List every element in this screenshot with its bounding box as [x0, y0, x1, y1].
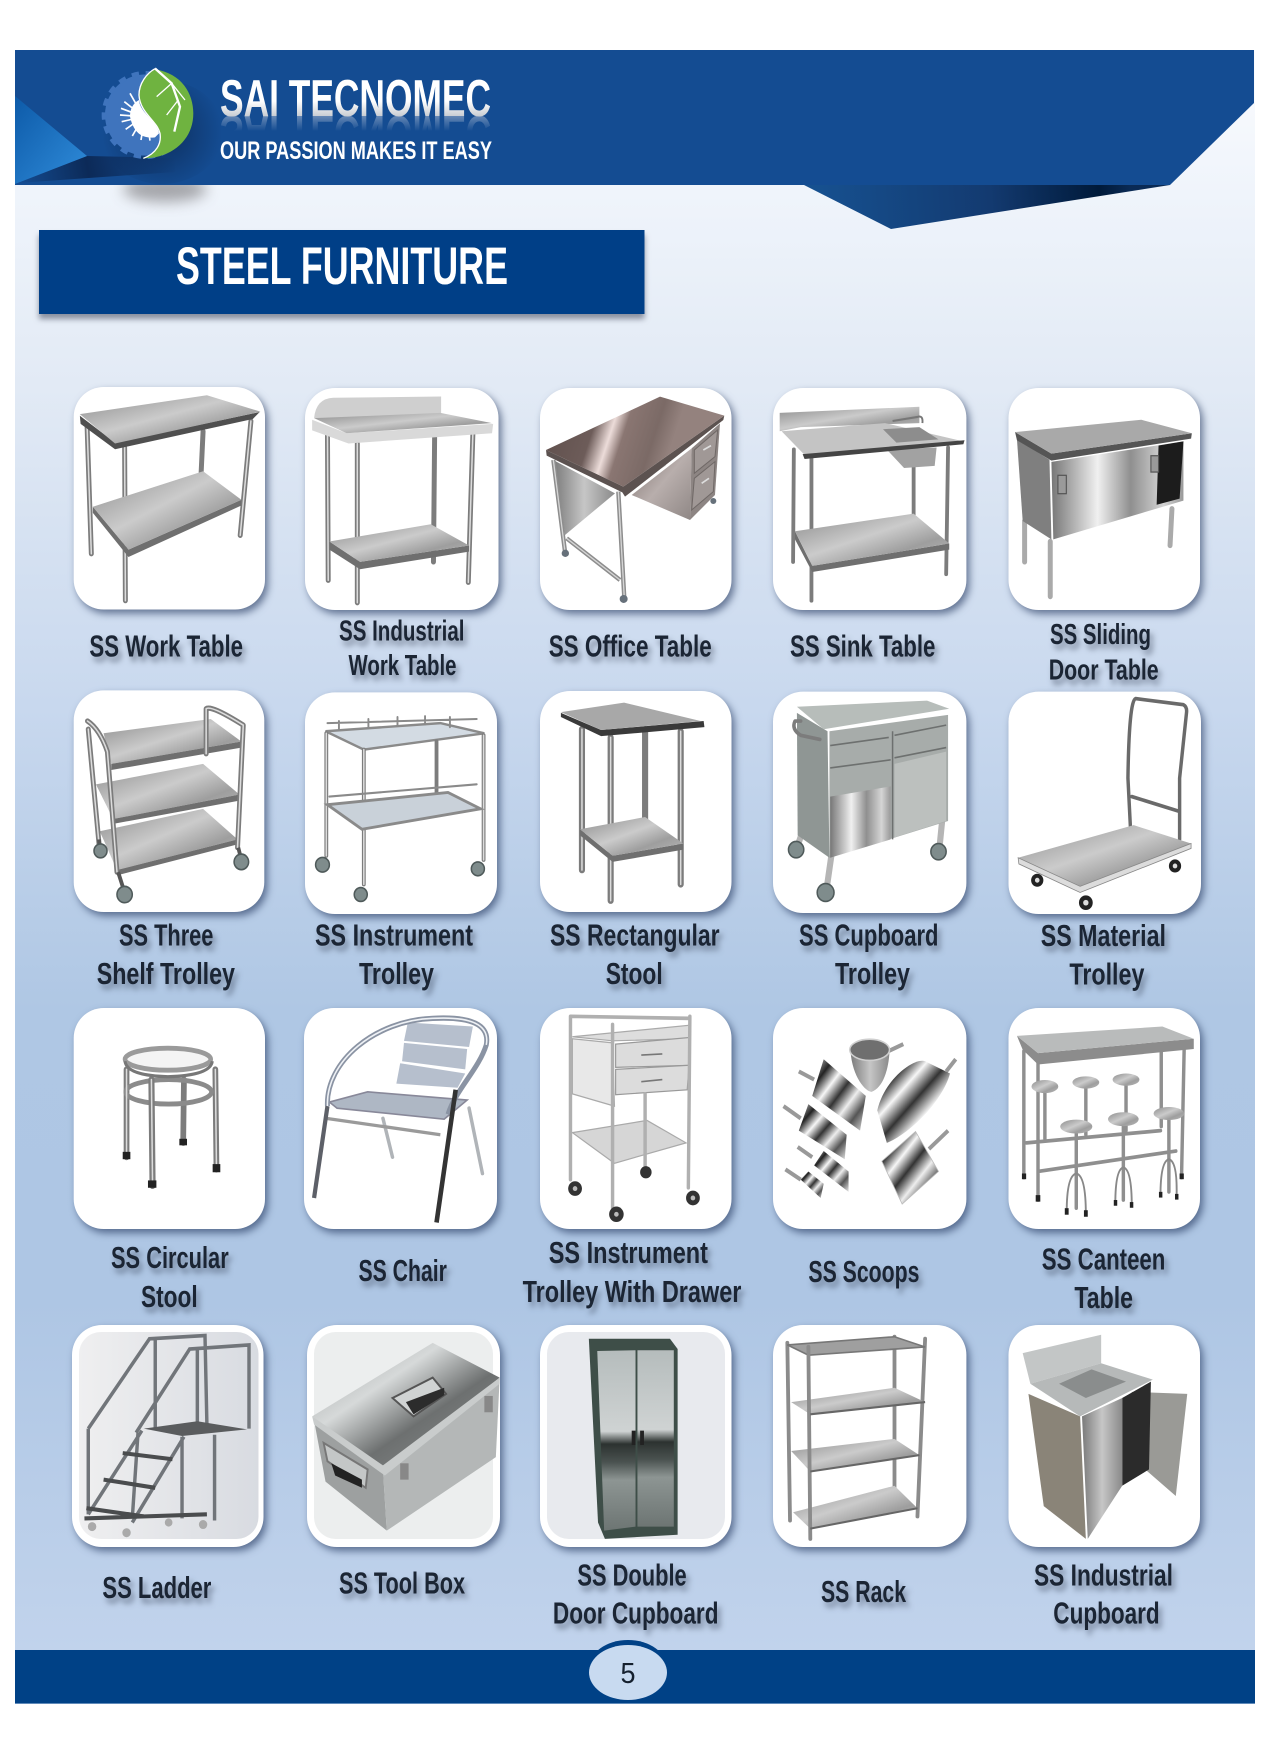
label: SS Industrial Cupboard — [1034, 1558, 1173, 1631]
product card: SS Circular Stool — [74, 1008, 265, 1314]
product card: SS Tool Box — [307, 1325, 500, 1600]
heading text: STEEL FURNITURE — [176, 237, 508, 296]
product card: SS Cupboard Trolley — [773, 692, 966, 991]
label: SS Sliding Door Table: Door Table — [1049, 654, 1159, 686]
icon: ladder — [84, 1336, 249, 1537]
label: SS Scoops: SS Scoops — [808, 1254, 919, 1289]
page number: 5 — [620, 1658, 636, 1690]
label: SS Circular Stool: SS Circular — [111, 1240, 229, 1275]
section heading — [39, 230, 644, 314]
image backdrop — [547, 1332, 725, 1539]
card background — [773, 692, 966, 913]
card background — [1008, 1008, 1200, 1229]
card background — [304, 1008, 497, 1229]
icon: scoops — [784, 1039, 956, 1204]
product card: SS Office Table — [540, 388, 732, 664]
label: SS Chair: SS Chair — [358, 1253, 447, 1288]
product card: SS Ladder — [72, 1325, 264, 1605]
label: SS Office Table: SS Office Table — [549, 628, 712, 664]
card background — [540, 1008, 732, 1229]
card background — [307, 1325, 500, 1547]
product card: SS Sink Table — [773, 388, 966, 664]
label: SS Industrial Work Table — [339, 616, 464, 682]
card background — [74, 387, 265, 610]
company name: SAI TECNOMEC — [220, 70, 491, 128]
label: SS Industrial Work Table: SS Industrial — [339, 616, 464, 648]
card background — [305, 388, 498, 610]
product card: SS Sliding Door Table — [1008, 388, 1200, 686]
label: SS Instrument Trolley: SS Instrument — [315, 918, 473, 952]
icon: company logo gear and leaf — [104, 68, 193, 158]
label: SS Canteen Table: SS Canteen — [1042, 1241, 1165, 1276]
logo shadow under banner — [123, 176, 207, 202]
card background — [74, 1008, 265, 1229]
product card: SS Instrument Trolley — [305, 692, 497, 991]
card background — [540, 1325, 732, 1547]
left fold triangle dark — [17, 156, 175, 183]
header banner — [15, 50, 1254, 229]
card background — [74, 690, 264, 912]
icon: work table — [80, 395, 260, 601]
card background — [305, 692, 497, 914]
product card: SS Three Shelf Trolley — [74, 690, 264, 991]
label: SS Material Trolley — [1041, 918, 1166, 992]
icon: sliding door table — [1015, 420, 1192, 597]
product card: SS Material Trolley — [1008, 692, 1201, 992]
label: SS Ladder: SS Ladder — [102, 1570, 211, 1605]
card background — [1008, 388, 1200, 610]
label: SS Circular Stool — [111, 1240, 229, 1314]
label: SS Instrument Trolley — [315, 918, 473, 991]
label: SS Cupboard Trolley — [799, 918, 938, 991]
icon: rectangular stool — [561, 703, 704, 901]
label: SS Canteen Table: Table — [1074, 1280, 1133, 1315]
label: SS Canteen Table — [1042, 1241, 1165, 1315]
product card: SS Industrial Work Table — [305, 388, 498, 682]
card background — [773, 1325, 966, 1547]
card background — [72, 1325, 264, 1547]
label: SS Instrument Trolley With Drawer — [523, 1235, 741, 1309]
label: SS Material Trolley: SS Material — [1041, 918, 1166, 953]
icon: industrial work table — [312, 397, 493, 603]
label: SS Instrument Trolley: Trolley — [359, 956, 435, 991]
product card: SS Chair — [304, 1008, 497, 1288]
label: SS Double Door Cupboard: Door Cupboard — [553, 1596, 718, 1631]
card background — [1008, 692, 1201, 914]
label: SS Sliding Door Table — [1049, 619, 1159, 686]
page number ring — [589, 1640, 667, 1696]
label: SS Industrial Cupboard: Cupboard — [1053, 1596, 1160, 1631]
left fold triangle — [15, 96, 87, 184]
icon: instrument trolley with drawer — [568, 1016, 700, 1222]
card background — [773, 1008, 966, 1229]
product card: SS Canteen Table — [1008, 1008, 1200, 1315]
product card: SS Instrument Trolley With Drawer — [523, 1008, 741, 1309]
icon: instrument trolley — [316, 716, 484, 901]
card background — [540, 388, 732, 610]
label: SS Industrial Work Table: Work Table — [348, 650, 456, 682]
icon: tool box — [312, 1343, 500, 1531]
product card: SS Scoops — [773, 1008, 966, 1289]
image backdrop — [314, 1332, 493, 1539]
logo glow — [100, 80, 224, 184]
label: SS Instrument Trolley With Drawer: Trolley With Drawer — [523, 1274, 741, 1309]
label: SS Double Door Cupboard: SS Double — [577, 1558, 687, 1593]
label: SS Sliding Door Table: SS Sliding — [1050, 619, 1151, 651]
label: SS Three Shelf Trolley — [97, 918, 236, 991]
icon: industrial cupboard — [1023, 1335, 1187, 1539]
company name reflection: SAI TECNOMEC — [220, 104, 491, 162]
icon: cupboard trolley — [788, 701, 949, 901]
label: SS Tool Box: SS Tool Box — [339, 1566, 466, 1600]
product card: SS Rectangular Stool — [540, 691, 732, 991]
card background — [773, 388, 966, 610]
label: SS Three Shelf Trolley: Shelf Trolley — [97, 956, 236, 991]
page number badge — [589, 1645, 667, 1700]
card background — [1008, 1325, 1200, 1547]
label: SS Rectangular Stool: Stool — [606, 956, 663, 991]
label: SS Material Trolley: Trolley — [1069, 956, 1145, 992]
product card: SS Industrial Cupboard — [1008, 1325, 1200, 1631]
icon: material trolley — [1018, 699, 1191, 910]
icon: circular stool — [123, 1048, 220, 1188]
label: SS Three Shelf Trolley: SS Three — [119, 918, 213, 952]
label: SS Instrument Trolley With Drawer: SS Instrument — [549, 1235, 708, 1270]
card background — [540, 691, 732, 912]
label: SS Rectangular Stool — [550, 918, 720, 991]
footer band — [15, 1650, 1255, 1704]
label: SS Industrial Cupboard: SS Industrial — [1034, 1558, 1173, 1593]
label: SS Cupboard Trolley: Trolley — [835, 956, 911, 991]
icon: sink table — [780, 407, 965, 601]
icon: double door cupboard — [589, 1339, 678, 1539]
label: SS Double Door Cupboard — [553, 1558, 718, 1631]
label: SS Work Table: SS Work Table — [89, 628, 243, 664]
icon: office table — [546, 397, 724, 603]
label: SS Rack: SS Rack — [821, 1574, 907, 1609]
tagline: OUR PASSION MAKES IT EASY — [220, 137, 492, 165]
product card: SS Rack — [773, 1325, 966, 1609]
product card: SS Double Door Cupboard — [540, 1325, 732, 1631]
icon: rack — [787, 1337, 925, 1539]
icon: canteen table — [1017, 1027, 1194, 1217]
footer bar — [15, 1640, 1255, 1704]
label: SS Cupboard Trolley: SS Cupboard — [799, 918, 938, 952]
label: SS Sink Table: SS Sink Table — [790, 628, 935, 664]
icon: chair — [314, 1018, 487, 1222]
ribbon fold right — [804, 185, 1170, 229]
label: SS Rectangular Stool: SS Rectangular — [550, 918, 720, 952]
image backdrop — [79, 1332, 258, 1539]
label: SS Circular Stool: Stool — [141, 1279, 198, 1314]
icon: three shelf trolley — [88, 708, 249, 903]
heading box — [39, 230, 644, 314]
product card: SS Work Table — [74, 387, 265, 664]
banner ribbon — [15, 50, 1254, 185]
